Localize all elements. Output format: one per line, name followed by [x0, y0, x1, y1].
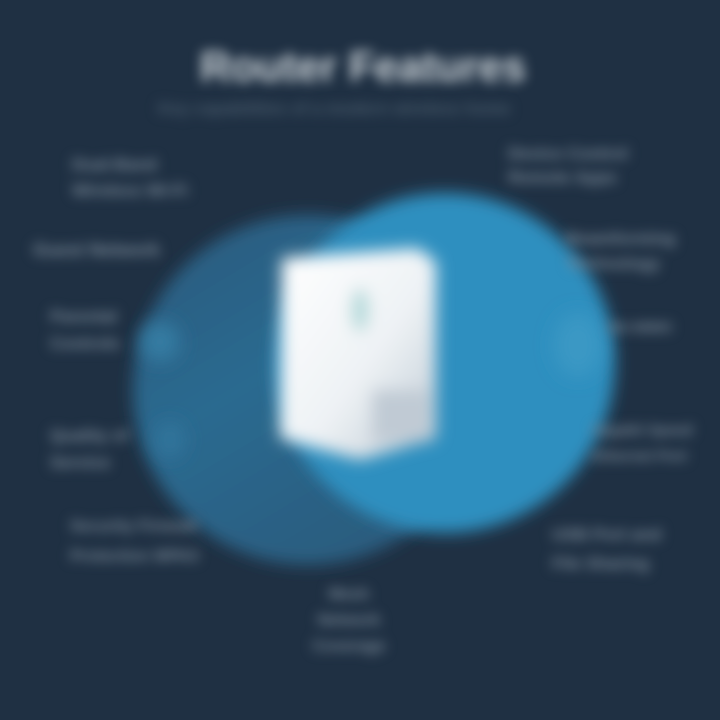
left circle edge highlights	[140, 322, 184, 458]
label: bottom right	[548, 523, 665, 576]
label: top left: Dual-Band	[72, 155, 157, 174]
label: top right: Remote Apps	[508, 168, 617, 187]
label: left 3	[46, 306, 122, 354]
label: top right: Device Control	[508, 144, 628, 163]
label: left 3: Controls	[50, 334, 120, 353]
label: right 4: Gigabit Speed	[592, 422, 693, 439]
subtitle: Key capabilities of a modern wireless home	[158, 99, 510, 118]
label: top left: Wireless Wi-Fi	[72, 181, 188, 200]
label: bottom right: USB Port and	[552, 525, 662, 544]
label: top left	[68, 154, 190, 201]
right circle	[275, 193, 615, 533]
label: left 3: Parental	[50, 307, 117, 326]
right circle highlight	[554, 313, 602, 377]
label: bottom left	[66, 516, 202, 566]
label: right 4: Ethernet Port	[592, 448, 687, 465]
label: bottom centre: Mesh	[329, 586, 369, 603]
label: bottom centre: Network	[317, 612, 381, 629]
label: left 4: Service	[50, 453, 110, 472]
left circle	[133, 215, 483, 565]
label: left 4	[47, 425, 132, 473]
label: right 2: Technology	[566, 254, 660, 273]
label: top right	[504, 143, 631, 190]
label: right 2: Beamforming	[566, 229, 676, 248]
label: bottom left: Protection WPA3	[70, 548, 199, 565]
label: bottom centre: Coverage	[313, 638, 385, 655]
label: bottom left: Security Firewall	[70, 518, 197, 535]
title: Router Features	[200, 44, 526, 91]
label: right 2	[562, 228, 680, 277]
label: bottom centre	[310, 583, 388, 658]
label: left 4: Quality of	[50, 426, 128, 445]
router device	[280, 248, 436, 460]
label: right 3: MU-MIMO	[608, 319, 673, 335]
label: left 2: Guest Network	[33, 240, 160, 260]
label: bottom right: File Sharing	[552, 554, 649, 573]
label: right 4	[589, 420, 696, 466]
